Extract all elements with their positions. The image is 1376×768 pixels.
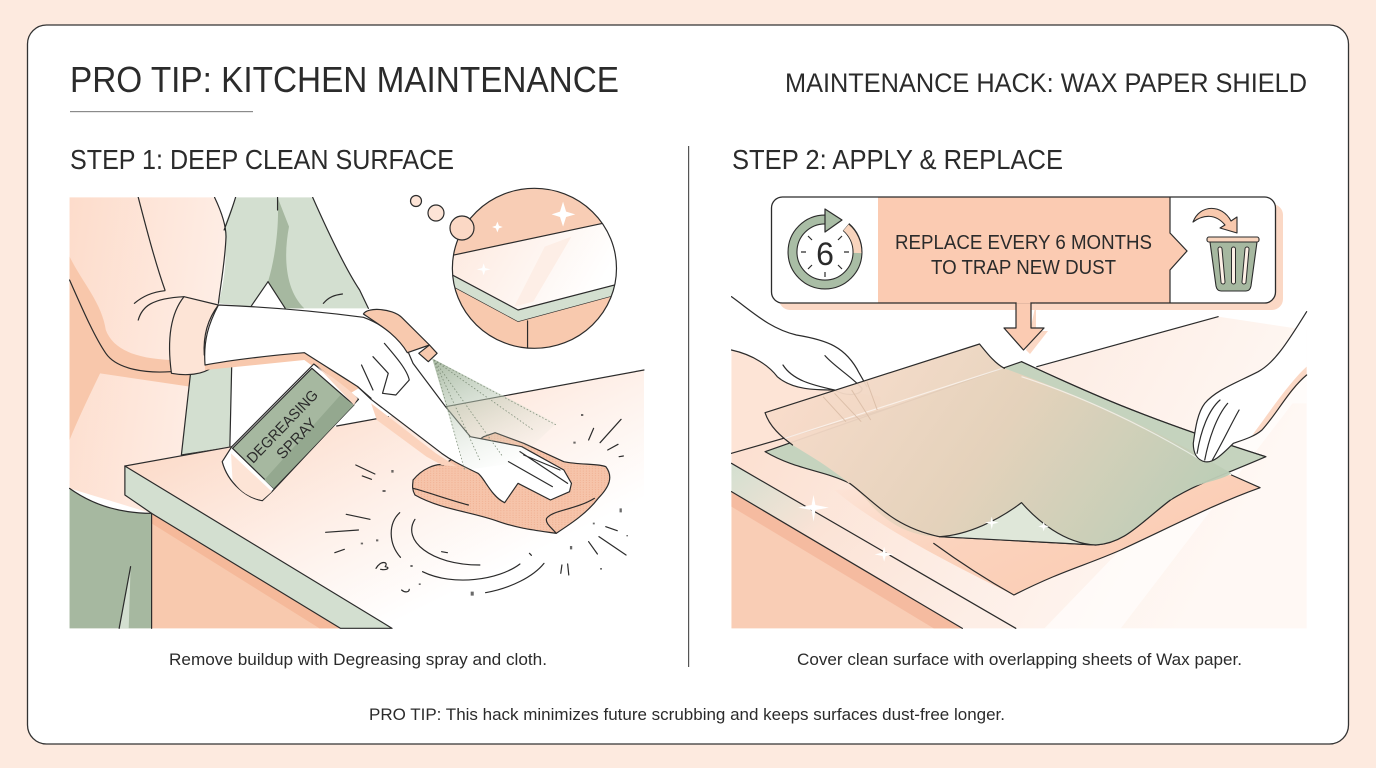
replace callout banner: TO TRAP NEW DUST [931, 257, 1116, 279]
arm lower outline [70, 280, 171, 372]
icon: 6 month clock [792, 209, 858, 284]
bin body [1210, 242, 1257, 291]
counter band [731, 463, 1016, 628]
green sheet [765, 362, 1266, 545]
glove shadow [205, 353, 358, 392]
glove arm shadow [371, 403, 457, 467]
right arm [1193, 312, 1307, 462]
left wall tint [731, 340, 880, 453]
subtitle: maintenance hack: MAINTENANCE HACK: WAX PAPER SHIELD [785, 68, 1307, 98]
scrub motion lines [326, 419, 626, 593]
spray bottle [222, 364, 358, 501]
left arm [731, 297, 867, 395]
green lower figure [181, 363, 232, 455]
cloth [413, 433, 610, 533]
crumbs [361, 414, 628, 596]
pants outline [70, 488, 152, 628]
pants detail [120, 571, 130, 628]
cabinet front [152, 513, 341, 628]
clock peach tail [846, 227, 858, 252]
spray mist [432, 358, 556, 470]
lens outline [452, 188, 616, 348]
lens peach top [454, 188, 601, 254]
lens cabinet [449, 285, 621, 353]
bottle shoulder shade [318, 367, 358, 405]
counter top [126, 370, 644, 600]
clock arrow head [825, 209, 842, 232]
clock ring [792, 220, 858, 284]
green back figure [218, 197, 368, 308]
cabinet shade [731, 492, 962, 628]
clock ticks [801, 236, 849, 277]
counter back line [125, 370, 644, 466]
banner shadow [779, 204, 1283, 310]
banner text: REPLACE EVERY 6 MONTHS [895, 232, 1152, 254]
bin lid [1207, 237, 1259, 242]
crumb squiggle [376, 562, 388, 570]
thought bubbles [410, 196, 474, 240]
title underline [70, 111, 253, 112]
right arm shade [1252, 367, 1307, 435]
rolled cuff [170, 297, 218, 375]
light beams [1044, 357, 1307, 628]
banner peach band [878, 197, 1187, 303]
step 2 heading: STEP 2: APPLY & REPLACE [732, 144, 1063, 175]
sheet fold line [785, 368, 1201, 460]
lens surface [449, 223, 621, 310]
cabinet front [731, 492, 962, 628]
banner box [772, 197, 1276, 303]
illustration: step 2 wax paper on counter [731, 297, 1307, 628]
pants [70, 488, 152, 628]
arrow body [1004, 303, 1044, 350]
lens green edge [449, 273, 621, 322]
bottle body [222, 364, 358, 501]
green back figure shade [268, 197, 304, 308]
bottle label shade [264, 395, 354, 488]
illustration: step 1 spraying and wiping counter [70, 197, 644, 628]
figure outlines [134, 197, 368, 320]
counter edge [125, 466, 392, 628]
sparkles [798, 495, 1049, 562]
right arm outline [1193, 312, 1307, 462]
arrow: banner down to sheet [1004, 300, 1048, 354]
clock face [797, 224, 853, 280]
lens background [449, 183, 621, 350]
fingers through sheet [823, 382, 877, 422]
left arm outline [731, 297, 867, 394]
replace callout banner [772, 197, 1283, 310]
icon: trash bin [1193, 208, 1259, 291]
lens sparkles [477, 202, 575, 275]
lens reflection [514, 237, 571, 307]
cabinet shade [152, 513, 341, 628]
sheet bottom edge [850, 483, 1170, 545]
clock number: 6 [816, 236, 834, 272]
translucent top sheet [765, 344, 1231, 545]
cloth fold [413, 488, 594, 533]
counter lines [731, 317, 1218, 628]
lens top edge and corner [449, 223, 606, 350]
counter surface [731, 317, 1307, 628]
magnified lens [449, 183, 621, 353]
glove hand wiping [205, 305, 571, 503]
banner divider [1170, 197, 1187, 303]
bottle label text: SPRAY [273, 415, 320, 463]
under sheet edge [934, 475, 1260, 595]
sheet top edge [765, 344, 1266, 457]
nozzle [419, 345, 437, 362]
sheet curl [939, 503, 1096, 545]
bottle label [233, 368, 354, 488]
arrow shadow [1026, 303, 1048, 354]
torso [70, 197, 226, 513]
bin slots [1220, 249, 1247, 282]
caption: step 2: Cover clean surface with overlapping sheets of Wax paper. [797, 650, 1242, 669]
step 1 heading: STEP 1: DEEP CLEAN SURFACE [70, 144, 454, 175]
caption: step 1: Remove buildup with Degreasing spray and cloth. [169, 650, 547, 669]
arm shading [70, 257, 190, 440]
bin arrow [1193, 208, 1237, 233]
banner outline [772, 197, 1276, 303]
footer pro tip: PRO TIP: This hack minimizes future scrubbing and keeps surfaces dust-free longer. [369, 705, 1005, 724]
arrow top cover [1017, 300, 1030, 304]
bottle base [231, 453, 272, 500]
bottle label text: DEGREASING [244, 387, 322, 467]
peach under sheet [835, 475, 1260, 595]
spray dots [434, 360, 556, 470]
trigger head [363, 309, 429, 353]
center divider [688, 146, 689, 667]
title: PRO TIP: KITCHEN MAINTENANCE [70, 59, 619, 100]
finger lines [358, 343, 568, 487]
